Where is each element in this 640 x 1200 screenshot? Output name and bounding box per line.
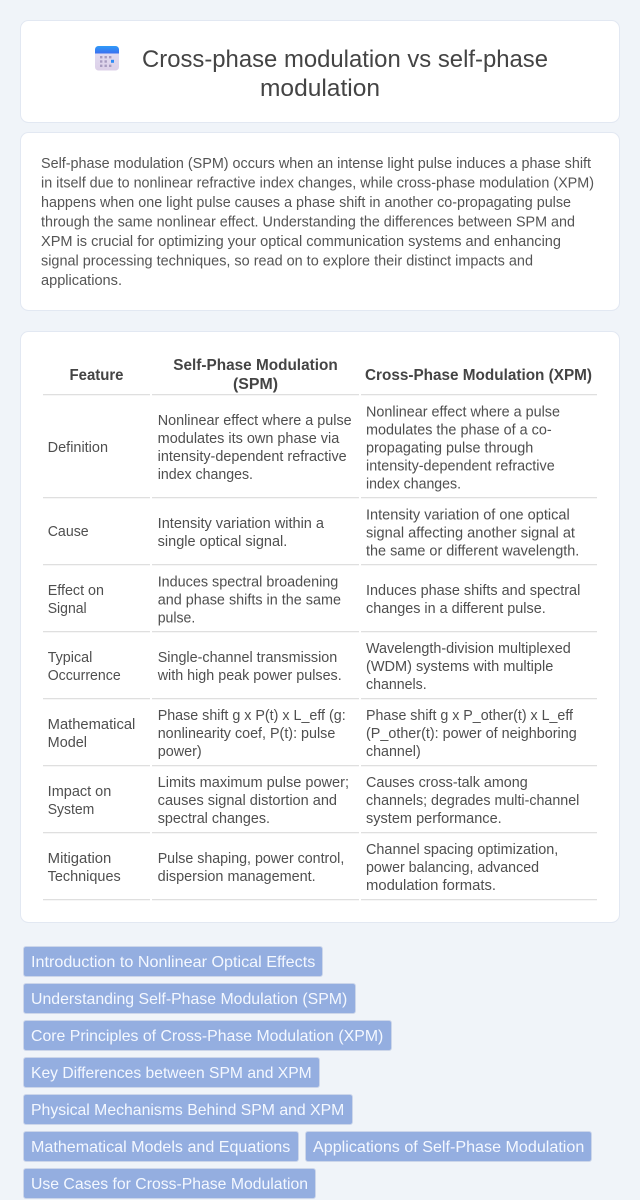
table row: effect on signal: Signal	[48, 601, 87, 617]
table row: mathematical model: Mathematical	[48, 717, 135, 733]
table row: cause: signal affecting another signal at	[366, 525, 575, 541]
table row: effect on signal: pulse.	[158, 610, 195, 626]
table header row: Cross-Phase Modulation (XPM)	[365, 367, 592, 384]
table row: typical occurrence	[48, 641, 571, 693]
table row: typical occurrence: channels.	[366, 677, 427, 693]
table row: mitigation techniques: dispersion management.	[158, 869, 316, 885]
table header row: Self-Phase Modulation	[173, 357, 338, 374]
table row: impact on system: Causes cross-talk among	[366, 775, 528, 791]
text block: introduction paragraph: XPM is crucial for optimizing your optical communication systems and enhancing	[41, 234, 561, 250]
table row: typical occurrence: Wavelength-division multiplexed	[366, 641, 571, 657]
table row: cause: Cause	[48, 524, 89, 540]
table row: definition: Definition	[48, 440, 108, 456]
tag: core principles of XPM	[24, 1020, 392, 1050]
table row: effect on signal: Induces spectral broadening	[158, 574, 338, 590]
table row: mathematical model: power)	[158, 744, 202, 760]
table row: mathematical model	[48, 708, 577, 760]
table row: impact on system	[48, 775, 579, 827]
table row: impact on system: Impact on	[48, 784, 111, 800]
table row: mitigation techniques: Techniques	[48, 869, 121, 885]
table row: impact on system: system performance.	[366, 811, 502, 827]
tag: introduction: Introduction to Nonlinear Optical Effects	[31, 954, 315, 971]
table row: effect on signal	[48, 574, 580, 626]
title	[142, 46, 548, 102]
tag: understanding SPM	[24, 984, 356, 1014]
table row: definition: modulates the phase of a co-	[366, 422, 552, 438]
table row: typical occurrence: Occurrence	[48, 668, 121, 684]
table row: mitigation techniques	[48, 842, 558, 894]
table row: mathematical model: (P_other(t): power of neighboring	[366, 726, 577, 742]
tag: mathematical models	[24, 1132, 298, 1162]
table row: mitigation techniques: Mitigation	[48, 851, 111, 867]
table row: impact on system: Limits maximum pulse power;	[158, 775, 349, 791]
table row: definition: propagating pulse through	[366, 440, 533, 456]
table row: definition: Nonlinear effect where a pulse	[158, 413, 352, 429]
table row: definition: modulates its own phase via	[158, 431, 339, 447]
tag: understanding SPM: Understanding Self-Phase Modulation (SPM)	[31, 991, 347, 1008]
table row: cause: the same or different wavelength.	[366, 543, 579, 559]
table row: typical occurrence: Single-channel transmission	[158, 650, 337, 666]
tag: core principles of XPM: Core Principles of Cross-Phase Modulation (XPM)	[31, 1028, 383, 1045]
table row: mathematical model: Phase shift g x P_other(t) x L_eff	[366, 708, 574, 724]
tag: key differences: Key Differences between SPM and XPM	[31, 1065, 312, 1082]
icon: calendar	[95, 46, 119, 70]
text block: introduction paragraph: Self-phase modulation (SPM) occurs when an intense light pulse induces a phase shift	[41, 156, 591, 172]
table row: definition: index changes.	[366, 476, 461, 492]
tag: applications of SPM: Applications of Self-Phase Modulation	[313, 1139, 584, 1156]
tag: use cases for XPM: Use Cases for Cross-Phase Modulation	[31, 1176, 308, 1193]
text block: introduction paragraph: applications.	[41, 273, 122, 289]
text block: introduction paragraph: in itself due to nonlinear refractive index changes, while cross-phase modulation (XPM)	[41, 176, 594, 192]
table row: mathematical model: channel)	[366, 744, 421, 760]
table row: effect on signal: Effect on	[48, 583, 104, 599]
table row: definition: intensity-dependent refractive	[366, 458, 555, 474]
table row: typical occurrence: (WDM) systems with multiple	[366, 659, 553, 675]
tag: mathematical models: Mathematical Models and Equations	[31, 1139, 290, 1156]
tag: introduction	[24, 946, 322, 976]
table row: typical occurrence: with high peak power pulses.	[157, 668, 342, 684]
table row: mitigation techniques: Pulse shaping, power control,	[158, 851, 344, 867]
table header row	[70, 357, 592, 393]
table row: mathematical model: Phase shift g x P(t) x L_eff (g:	[158, 708, 346, 724]
table row: definition: index changes.	[158, 467, 253, 483]
tag: physical mechanisms: Physical Mechanisms Behind SPM and XPM	[31, 1102, 344, 1119]
table row: mathematical model: Model	[48, 735, 87, 751]
table row: effect on signal: changes in a different pulse.	[366, 601, 546, 617]
table header row: (SPM)	[233, 376, 278, 393]
table row: cause: Intensity variation of one optical	[366, 507, 570, 523]
table row: impact on system: System	[48, 802, 94, 818]
panel: introduction	[20, 132, 620, 310]
table row: impact on system: channels; degrades multi-channel	[366, 793, 579, 809]
table row: typical occurrence: Typical	[48, 650, 92, 666]
title: modulation	[260, 75, 380, 102]
panel: topic tags	[24, 946, 592, 1198]
text block: introduction paragraph	[41, 156, 594, 289]
table row: definition: intensity-dependent refractive	[158, 449, 347, 465]
table row: impact on system: causes signal distortion and	[158, 793, 337, 809]
title: Cross-phase modulation vs self-phase	[142, 46, 548, 73]
table row: mathematical model: nonlinearity coef, P(t): pulse	[158, 726, 335, 742]
text block: introduction paragraph: signal processing techniques, so read on to explore their distinct impacts and	[41, 254, 533, 270]
table row: cause: single optical signal.	[158, 534, 287, 550]
panel: comparison table	[20, 332, 620, 922]
tag: applications of SPM	[306, 1132, 592, 1162]
text block: introduction paragraph: through the same nonlinear effect. Understanding the differences between SPM and	[41, 214, 575, 230]
tag: use cases for XPM	[24, 1168, 316, 1198]
panel: title card	[20, 20, 620, 122]
table row: mitigation techniques: power balancing, advanced	[366, 860, 539, 876]
tag: physical mechanisms	[24, 1094, 352, 1124]
table row: impact on system: spectral changes.	[158, 811, 270, 827]
table row: definition	[48, 404, 560, 492]
table row: cause: Intensity variation within a	[158, 516, 324, 532]
table row: effect on signal: and phase shifts in the same	[158, 592, 341, 608]
text block: introduction paragraph: happens when one light pulse causes a phase shift in another co-propagating pulse	[41, 195, 571, 211]
table row: definition: Nonlinear effect where a pulse	[366, 404, 560, 420]
tag: key differences	[24, 1058, 320, 1088]
table row: mitigation techniques: modulation formats.	[366, 878, 496, 894]
table row: cause	[48, 507, 579, 559]
table row: mitigation techniques: Channel spacing optimization,	[366, 842, 558, 858]
table row: effect on signal: Induces phase shifts and spectral	[366, 583, 580, 599]
table header row: Feature	[70, 367, 124, 384]
